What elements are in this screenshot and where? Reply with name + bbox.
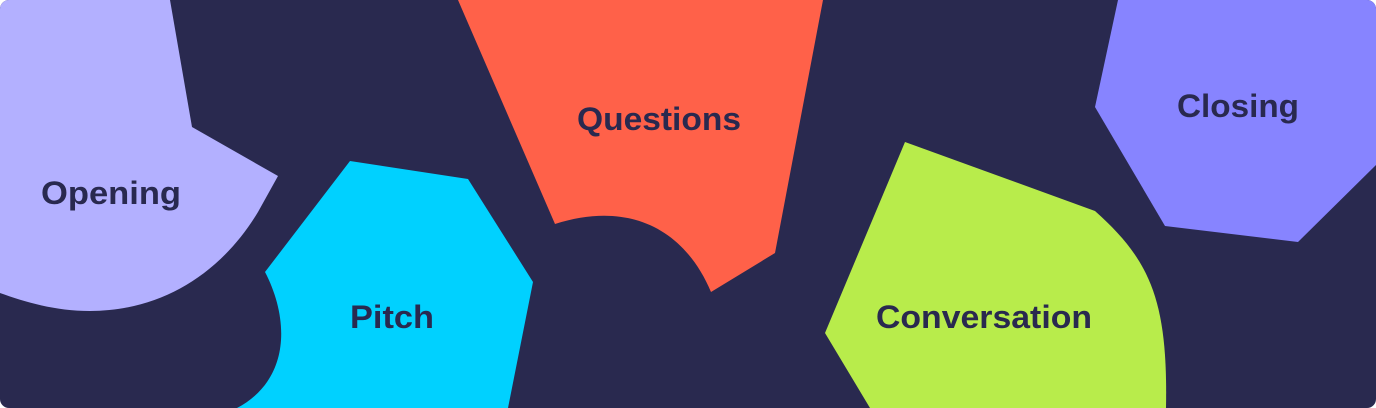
- label: conversation: Conversation: [876, 299, 1092, 335]
- label: questions: Questions: [577, 101, 741, 137]
- shape: questions: [458, 0, 823, 292]
- label: opening: Opening: [41, 175, 181, 211]
- shape: pitch: [237, 161, 533, 408]
- shape: opening: [0, 0, 278, 311]
- label: pitch: Pitch: [350, 299, 434, 335]
- shape: closing: [1095, 0, 1376, 242]
- shape: conversation: [825, 142, 1166, 408]
- label: closing: Closing: [1177, 88, 1299, 124]
